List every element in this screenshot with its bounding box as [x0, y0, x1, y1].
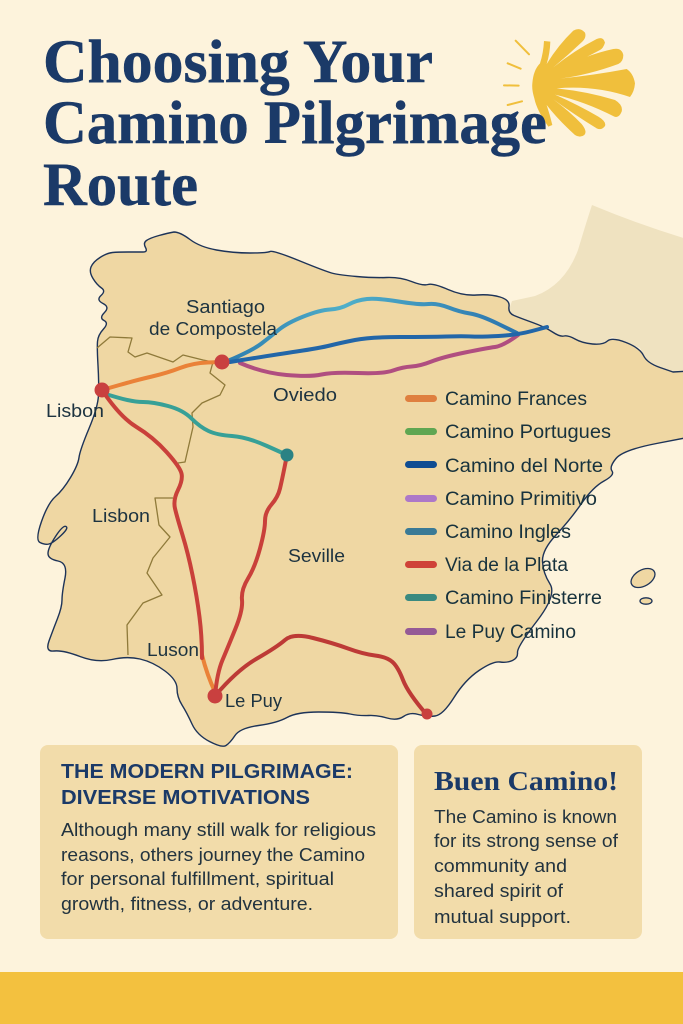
route: red southern coast	[215, 636, 427, 715]
marker: Lisbon	[94, 382, 110, 398]
title: Route	[43, 152, 198, 219]
panel body text: The Camino is known	[434, 807, 617, 827]
route: teal Finisterre	[102, 393, 287, 455]
panel body text: Although many still walk for religious	[61, 820, 376, 840]
marker: Le Puy	[208, 688, 222, 704]
panel body text: shared spirit of	[434, 881, 564, 901]
map labels: Santiago	[186, 297, 265, 317]
map: Iberian peninsula	[38, 232, 683, 746]
legend text: Camino Primitivo	[445, 489, 597, 510]
panel body text: for personal fulfillment, spiritual	[61, 869, 334, 889]
map: Balearic islands	[628, 565, 658, 604]
map: Portugal border	[97, 337, 225, 655]
icon: scallop shell	[504, 29, 635, 137]
route: red from Lisbon	[102, 390, 202, 658]
panel body text: growth, fitness, or adventure.	[61, 894, 313, 914]
map labels: Lisbon	[92, 506, 150, 526]
map labels: Lisbon	[46, 401, 104, 421]
legend text: Camino Ingles	[445, 522, 571, 543]
legend text: Camino Finisterre	[445, 588, 602, 609]
map labels: Seville	[288, 546, 345, 566]
panel body text: reasons, others journey the Camino	[61, 845, 365, 865]
title: Choosing Your	[43, 29, 433, 96]
map labels: Oviedo	[273, 385, 337, 405]
panel: the modern pilgrimage	[40, 745, 398, 939]
legend text: Camino del Norte	[445, 456, 603, 477]
panel body text: mutual support.	[434, 907, 571, 927]
neighbouring land: France	[508, 205, 683, 372]
legend text: Camino Portugues	[445, 422, 611, 443]
route: orange southern end	[202, 655, 215, 692]
route: light blue coastal	[230, 299, 517, 360]
chart: routes on the map	[94, 299, 547, 720]
panel heading	[61, 761, 353, 809]
legend text	[445, 389, 611, 643]
panel heading: THE MODERN PILGRIMAGE:	[61, 761, 353, 783]
panel heading: DIVERSE MOTIVATIONS	[61, 787, 310, 809]
route: orange Camino Frances	[102, 362, 222, 390]
panel body text: community and	[434, 856, 567, 876]
marker: Santiago	[214, 354, 230, 370]
panel body text	[434, 807, 619, 927]
legend text: Le Puy Camino	[445, 622, 576, 643]
title	[43, 29, 547, 219]
panel body text	[61, 820, 376, 914]
legend swatches	[405, 395, 437, 635]
map labels: de Compostela	[149, 319, 278, 339]
panel heading: Buen Camino!	[434, 766, 618, 796]
map labels: Le Puy	[225, 691, 282, 711]
panel: buen camino	[414, 745, 642, 939]
panel body text: for its strong sense of	[434, 831, 619, 851]
route: red Via de la Plata	[215, 455, 287, 696]
map labels: Luson	[147, 640, 199, 660]
route: plum Le Puy	[240, 335, 518, 376]
marker: teal end	[280, 448, 294, 462]
legend text: Via de la Plata	[445, 555, 568, 576]
map labels	[46, 297, 345, 711]
route: blue del Norte	[230, 327, 547, 362]
marker: south coast	[422, 708, 432, 720]
legend	[405, 389, 611, 643]
footer band	[0, 972, 683, 1024]
legend text: Camino Frances	[445, 389, 587, 410]
title: Camino Pilgrimage	[43, 90, 547, 157]
